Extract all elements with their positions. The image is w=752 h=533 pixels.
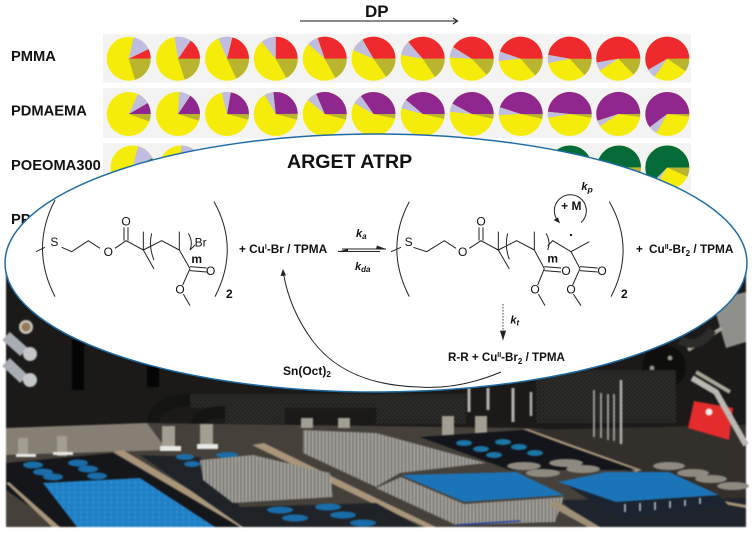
- termination product: 2: [518, 357, 523, 366]
- white tube, right: [692, 378, 746, 445]
- deactivator text: II: [665, 244, 669, 251]
- dormant polymer structure: Br: [195, 235, 207, 249]
- heading: ARGET ATRP: [287, 151, 412, 173]
- tan plate rails: [6, 429, 746, 527]
- termination arrow: t: [516, 318, 519, 327]
- blue plate 1 with vial side: [376, 472, 564, 525]
- reagent: Cu(I) catalyst: + Cu: [239, 242, 265, 256]
- termination product: -Br: [501, 351, 518, 364]
- dormant polymer structure: O: [175, 282, 185, 296]
- dormant polymer structure: O: [121, 214, 131, 228]
- row label: PDMAEMA: PDMAEMA: [11, 104, 87, 120]
- photo: robotic synthesis platform: [6, 264, 749, 527]
- regeneration curve arrow: [280, 269, 501, 387]
- dormant polymer structure: O: [206, 264, 215, 278]
- dormant polymer structure: O: [104, 245, 113, 259]
- deactivator text: / TPMA: [690, 242, 734, 256]
- equilibrium arrows with rate constants: a: [362, 232, 367, 241]
- blue block, left: [43, 478, 215, 527]
- active radical polymer structure: m: [547, 251, 558, 265]
- equilibrium arrows with rate constants: [338, 228, 386, 274]
- red tag: [688, 401, 733, 440]
- active radical polymer structure: O: [597, 264, 607, 278]
- black plate with holes, left: [6, 453, 240, 527]
- vial rack, rear: [303, 430, 486, 487]
- equilibrium arrows with rate constants: da: [361, 265, 371, 274]
- blue wells, right plate: [456, 439, 543, 458]
- arrow: [300, 18, 458, 24]
- termination product: / TPMA: [522, 351, 566, 364]
- blue wells, middle plate: [176, 452, 376, 526]
- termination arrow: [500, 304, 519, 341]
- active radical polymer structure: O: [476, 214, 486, 228]
- reagent: Cu(I) catalyst: -Br / TPMA: [267, 242, 328, 256]
- dormant polymer structure: 2: [226, 287, 233, 301]
- bottom rail: [548, 500, 600, 527]
- propagation cycle: [554, 181, 593, 223]
- deactivator text: -Br: [669, 242, 686, 256]
- deactivator text: Cu: [649, 242, 665, 256]
- nuts on plate: [16, 416, 487, 457]
- row of pie charts: PMMA: [103, 34, 691, 82]
- row of pie charts: PDMAEMA: [103, 88, 691, 138]
- round connector: [642, 328, 730, 392]
- termination product: R-R + Cu: [448, 351, 497, 364]
- dormant polymer structure: [36, 200, 233, 306]
- pipette tips: [469, 380, 621, 444]
- reducing agent label: Sn(Oct): [283, 364, 326, 378]
- active radical polymer structure: [391, 181, 628, 341]
- ellipse: [5, 134, 747, 392]
- propagation cycle: k: [581, 181, 587, 193]
- blue plate 2: [558, 472, 728, 520]
- dormant polymer structure: S: [50, 235, 58, 249]
- blue wells, left plate: [23, 460, 107, 480]
- propagation cycle: p: [586, 185, 593, 195]
- row label: PMMA: PMMA: [11, 49, 56, 65]
- black plate with holes, right: [420, 430, 636, 470]
- middle dark plate: [140, 455, 420, 527]
- light housing right: [712, 292, 746, 348]
- propagation cycle: + M: [561, 199, 582, 213]
- DP axis arrow: [300, 2, 458, 24]
- ARGET ATRP ellipse panel: [5, 134, 747, 392]
- equilibrium arrows with rate constants: k: [356, 228, 362, 240]
- silver wells: [507, 459, 749, 490]
- reagent: Cu(II) deactivator: +: [636, 242, 643, 256]
- active radical polymer structure: S: [405, 235, 413, 249]
- DP label: DP: [365, 2, 389, 21]
- active radical polymer structure: 2: [621, 287, 628, 301]
- row label: PP (partly hidden): PP: [11, 212, 31, 228]
- vial rack, front: [200, 455, 333, 503]
- row label: POEOMA300: POEOMA300: [11, 158, 101, 174]
- base plate: [6, 423, 746, 527]
- active radical polymer structure: O: [561, 264, 571, 278]
- deactivator text: 2: [686, 249, 691, 258]
- reducing agent label: 2: [326, 370, 331, 379]
- active radical polymer structure: O: [530, 282, 540, 296]
- left metal fittings: [6, 320, 159, 390]
- cables: [153, 370, 676, 425]
- active radical polymer structure: O: [566, 282, 576, 296]
- termination product: II: [497, 352, 501, 359]
- active radical polymer structure: O: [458, 245, 467, 259]
- termination arrow: k: [510, 314, 516, 326]
- row of pie charts: POEOMA300: [103, 143, 691, 191]
- reagent: Cu(I) catalyst: I: [265, 244, 267, 251]
- equilibrium arrows with rate constants: k: [355, 261, 361, 273]
- dormant polymer structure: m: [191, 252, 202, 266]
